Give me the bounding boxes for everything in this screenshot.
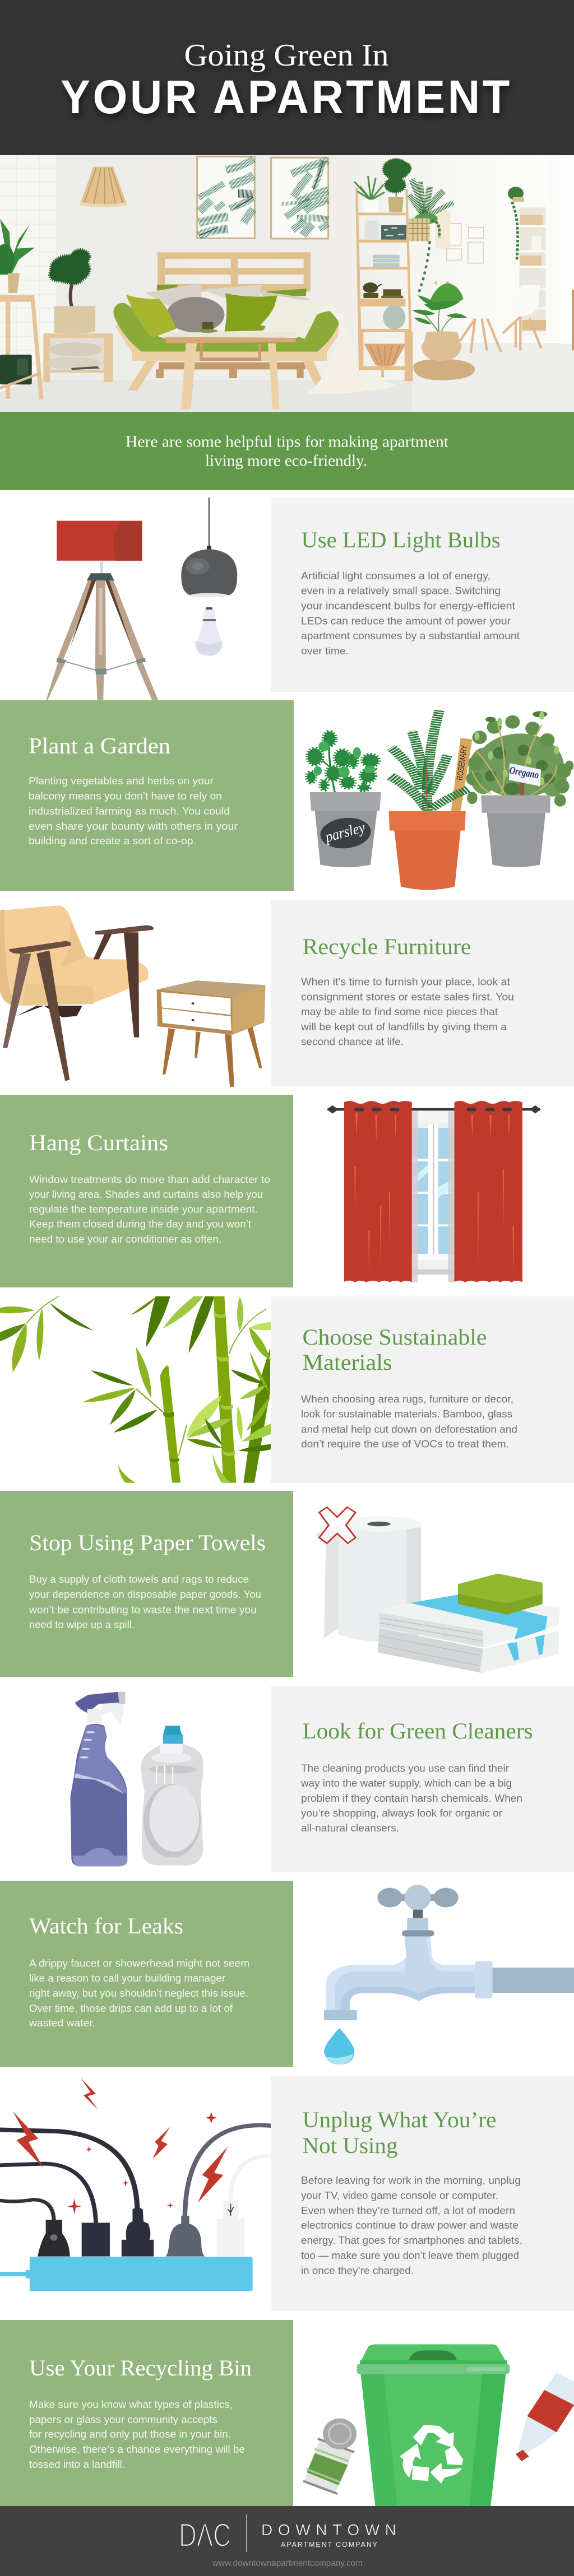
heading: Recycle Furniture bbox=[303, 934, 471, 959]
photo: green living room bbox=[0, 155, 574, 412]
icon: armchair bbox=[0, 905, 154, 1081]
heading: Stop Using Paper Towels bbox=[29, 1530, 266, 1555]
panel: recycling text bbox=[0, 2320, 293, 2506]
panel: materials text bbox=[271, 1296, 574, 1483]
body text: tossed into a landfill. bbox=[29, 2458, 125, 2470]
body text: your living area. Shades and curtains also help you bbox=[29, 1188, 263, 1200]
heading: Use Your Recycling Bin bbox=[29, 2355, 252, 2380]
body text: The cleaning products you use can find their bbox=[301, 1763, 509, 1774]
framed leaf prints bbox=[197, 157, 328, 239]
body text: in once they’re charged. bbox=[301, 2265, 414, 2276]
body text bbox=[301, 2174, 522, 2276]
icon: floor lamp bbox=[46, 521, 158, 700]
body text: second chance at life. bbox=[301, 1035, 404, 1048]
body text: won’t be contributing to waste the next time you bbox=[29, 1603, 257, 1616]
body text: Artificial light consumes a lot of energy, bbox=[301, 570, 490, 582]
body text: all-natural cleansers. bbox=[301, 1822, 399, 1834]
body text: energy. That goes for smartphones and tablets, bbox=[301, 2234, 522, 2246]
body text: regulate the temperature inside your apartment. bbox=[29, 1203, 258, 1215]
body text: When it’s time to furnish your place, look at bbox=[301, 976, 510, 987]
body text: Buy a supply of cloth towels and rags to reduce bbox=[29, 1573, 249, 1585]
tip: green cleaners bbox=[70, 1686, 574, 1872]
body text: papers or glass your community accepts bbox=[29, 2414, 217, 2425]
oregano foliage bbox=[466, 711, 573, 807]
right side of room bbox=[355, 155, 574, 381]
icon: side table bbox=[157, 980, 265, 1087]
body text: need to use your air conditioner as often. bbox=[29, 1233, 221, 1245]
tree in basket bbox=[49, 249, 95, 334]
panel: garden text bbox=[0, 700, 294, 891]
body text: look for sustainable materials. Bamboo, glass bbox=[301, 1408, 512, 1420]
body text: wasted water. bbox=[29, 2017, 95, 2029]
header banner bbox=[0, 0, 574, 155]
console table with plant and box bbox=[0, 218, 43, 399]
heading bbox=[303, 1324, 487, 1375]
plastic bottle bbox=[516, 2373, 574, 2461]
white bookcase bbox=[508, 187, 547, 341]
body text bbox=[29, 1573, 261, 1630]
hanging palm bbox=[409, 179, 453, 294]
body text: balcony means you don’t have to rely on bbox=[29, 790, 222, 802]
icon: window with red curtains bbox=[327, 1101, 541, 1282]
body text: Before leaving for work in the morning, unplug bbox=[301, 2174, 521, 2186]
brick wall bbox=[0, 155, 56, 392]
body text: building and create a sort of co-op. bbox=[29, 835, 196, 847]
icon: herb pots: Oregano bbox=[508, 765, 540, 782]
heading bbox=[303, 2107, 497, 2158]
tip: LED bulbs bbox=[46, 497, 574, 700]
heading: Materials bbox=[303, 1350, 392, 1375]
body text: need to wipe up a spill. bbox=[29, 1619, 135, 1630]
icon: paper towel roll and cloth towels bbox=[316, 1507, 560, 1673]
tip: unplug bbox=[0, 2076, 574, 2311]
body text: Otherwise, there’s a chance everything will be bbox=[29, 2443, 245, 2455]
heading: Watch for Leaks bbox=[29, 1913, 183, 1938]
pendant lamp bbox=[80, 167, 127, 207]
body text: will be kept out of landfills by giving them a bbox=[300, 1021, 507, 1033]
tip: plant a garden bbox=[0, 700, 573, 891]
icon: pendant and LED bulb bbox=[181, 497, 237, 655]
body text: electronics continue to draw power and waste bbox=[301, 2219, 519, 2231]
body text: even in a relatively small space. Switching bbox=[301, 585, 501, 596]
heading: Plant a Garden bbox=[29, 733, 170, 759]
body text: When choosing area rugs, furniture or decor, bbox=[301, 1393, 513, 1405]
body text: too — make sure you don’t leave them plugged bbox=[301, 2249, 519, 2261]
body text: Over time, those drips can add up to a lot of bbox=[29, 2002, 233, 2014]
pallet headboard bbox=[158, 252, 311, 291]
body text: A drippy faucet or showerhead might not seem bbox=[29, 1957, 249, 1969]
left furniture and plants bbox=[0, 167, 127, 399]
tip: recycling bin bbox=[0, 2320, 574, 2506]
body text: you’re shopping, always look for organic or bbox=[301, 1807, 502, 1819]
heading: Choose Sustainable bbox=[303, 1324, 487, 1350]
icon: herb pots: ROSEMARY bbox=[455, 745, 469, 781]
parsley foliage bbox=[307, 732, 378, 793]
body text: may be able to find some nice pieces that bbox=[301, 1006, 498, 1017]
body text: LEDs can reduce the amount of power your bbox=[301, 615, 511, 626]
heading: Use LED Light Bulbs bbox=[302, 527, 500, 552]
panel: curtains text bbox=[0, 1095, 293, 1287]
red sparks bbox=[13, 2078, 228, 2214]
icon: dripping faucet bbox=[324, 1885, 574, 2064]
body text: industrialized farming as much. You could bbox=[29, 805, 230, 817]
body text bbox=[29, 1173, 270, 1245]
logo mark: DΛC bbox=[179, 2517, 231, 2554]
body text: for recycling and only put those in your bin. bbox=[29, 2428, 231, 2440]
footer bbox=[0, 2506, 574, 2576]
white chairs bbox=[461, 285, 541, 352]
intro band bbox=[0, 412, 574, 490]
body text: Window treatments do more than add character to bbox=[29, 1173, 270, 1185]
body text: apartment consumes by a substantial amount bbox=[301, 630, 520, 641]
body text bbox=[300, 976, 514, 1048]
body text: right away, but you shouldn’t neglect this issue. bbox=[29, 1987, 248, 1999]
pillar and curtain bbox=[561, 343, 572, 344]
cabinet with pillows bbox=[43, 333, 113, 382]
body text: Planting vegetables and herbs on your bbox=[29, 775, 214, 787]
intro text: Here are some helpful tips for making apartment bbox=[126, 433, 448, 450]
body text: your dependence on disposable paper goods. You bbox=[29, 1588, 261, 1600]
body text: problem if they contain harsh chemicals. When bbox=[301, 1792, 522, 1804]
tip: watch for leaks bbox=[0, 1881, 574, 2067]
icon: recycling bin, can and bottle bbox=[303, 2345, 574, 2506]
tin can bbox=[303, 2419, 357, 2494]
icon: cleaning bottles bbox=[70, 1692, 203, 1867]
body text: consignment stores or estate sales first. You bbox=[301, 991, 514, 1003]
heading: Not Using bbox=[303, 2133, 398, 2158]
panel: leaks text bbox=[0, 1881, 293, 2067]
sofa and coffee table bbox=[113, 283, 396, 410]
title line two: YOUR APARTMENT bbox=[61, 71, 512, 123]
wall frames bbox=[447, 224, 484, 263]
body text bbox=[300, 1763, 522, 1834]
ladder shelf bbox=[355, 159, 413, 381]
panel: paper towels text bbox=[0, 1491, 293, 1677]
body text: your TV, video game console or computer. bbox=[301, 2189, 498, 2201]
website: www.downtownapartmentcompany.com bbox=[212, 2559, 363, 2568]
fan palm, basket and pouf bbox=[412, 281, 475, 380]
body text: over time. bbox=[301, 645, 349, 657]
body text: Even when they’re turned off, a lot of modern bbox=[301, 2205, 515, 2216]
recycling symbol bbox=[400, 2425, 463, 2484]
red cross mark bbox=[320, 1507, 355, 1543]
tip: hang curtains bbox=[0, 1095, 541, 1287]
tip: recycle furniture bbox=[0, 900, 574, 1087]
body text bbox=[301, 570, 520, 657]
panel: furniture text bbox=[271, 900, 574, 1086]
body text: your incandescent bulbs for energy-efficient bbox=[301, 599, 515, 612]
rosemary foliage bbox=[390, 710, 469, 811]
body text: Make sure you know what types of plastics, bbox=[29, 2398, 233, 2410]
body text bbox=[29, 775, 238, 847]
tip: paper towels bbox=[0, 1491, 560, 1677]
plant labels: parsley bbox=[322, 819, 367, 845]
panel: cleaners text bbox=[271, 1686, 574, 1872]
body text: Keep them closed during the day and you won’t bbox=[29, 1218, 251, 1230]
tip: sustainable materials bbox=[0, 1296, 574, 1483]
heading: Hang Curtains bbox=[29, 1130, 168, 1155]
wooden stake bbox=[451, 738, 472, 811]
body text: don’t require the use of VOCs to treat them. bbox=[301, 1438, 509, 1450]
intro band: living more eco-friendly. bbox=[205, 452, 367, 469]
hanging lantern bbox=[436, 211, 450, 249]
heading: Look for Green Cleaners bbox=[303, 1718, 533, 1743]
icon: power strip with plugs and sparks bbox=[0, 2078, 273, 2291]
company name: DOWNTOWN bbox=[261, 2521, 396, 2538]
body text bbox=[29, 1957, 249, 2029]
icon: herb pots bbox=[307, 710, 573, 890]
company subtitle: APARTMENT COMPANY bbox=[281, 2541, 378, 2549]
body text bbox=[29, 2398, 245, 2470]
icon: bamboo bbox=[0, 1296, 271, 1483]
panel: unplug text bbox=[271, 2076, 574, 2311]
title line one: Going Green In bbox=[184, 38, 389, 73]
panel: LED text bbox=[271, 497, 574, 692]
body text: and metal help cut down on deforestation and bbox=[301, 1423, 517, 1435]
body text: way into the water supply, which can be a big bbox=[300, 1777, 512, 1789]
body text: like a reason to call your building manager bbox=[29, 1972, 225, 1984]
body text bbox=[301, 1393, 517, 1450]
heading: Unplug What You’re bbox=[303, 2107, 497, 2132]
body text: even share your bounty with others in your bbox=[29, 820, 238, 832]
